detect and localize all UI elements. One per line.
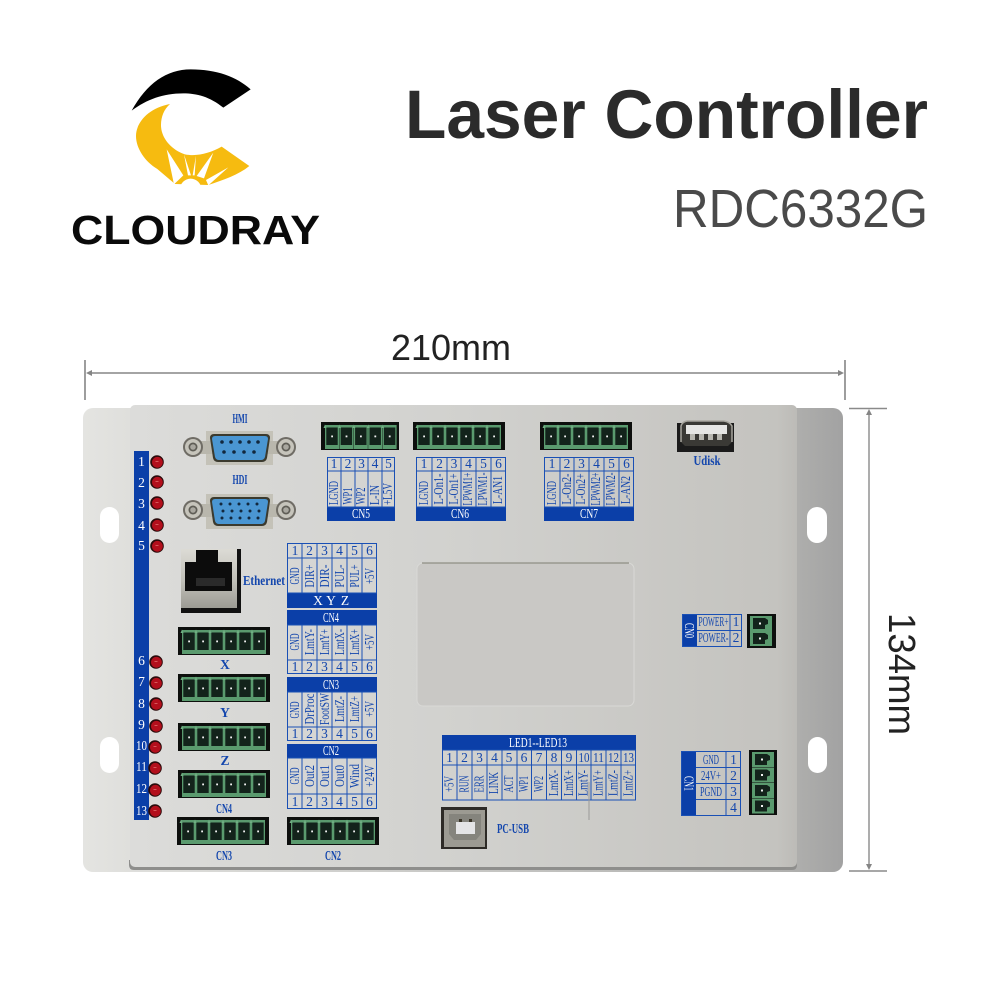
pin table CN7: 2 [564,456,570,471]
LED table [442,735,636,820]
LED strip: 8 [138,696,145,711]
CN0 terminal [747,614,776,648]
LED table: +5V [442,776,456,792]
CN1 terminal [749,750,777,815]
pin table CN3: DrProc [302,694,317,724]
mounting slots [100,507,827,773]
pin table CN4: CN4 [323,610,339,625]
CN1 power table: 3 [730,784,737,799]
LED table: RUN [456,775,472,792]
mounting flange [83,408,843,872]
terminal CN2: CN2 [325,848,341,863]
pin table CN4: LmtY- [302,629,317,655]
LED table: 8 [551,750,558,765]
pin table CN3: CN3 [323,677,339,692]
LED strip: 12 [136,781,147,796]
LED strip: 9 [138,717,145,732]
LED strip: 7 [138,674,145,689]
pin table CN2: Out1 [317,765,332,787]
pin table CN4: LmtX- [332,629,347,655]
pin table CN6: L-AN1 [490,476,505,504]
pin table CN6: 2 [436,456,443,471]
pin table CN3: +5V [362,701,377,717]
pin table CN5: WP1 [340,488,355,504]
terminal CN4: CN4 [216,801,232,816]
LED strip: 13 [136,803,147,818]
pin table CN7: L-On2+ [573,474,588,504]
terminal Z: Z [220,753,230,768]
pin table X Y Z [287,543,377,608]
pin table CN5 [326,456,395,521]
PC-USB port [441,807,529,849]
logo wordmark: CLOUDRAY [71,207,320,253]
pin table CN4: 6 [366,659,373,674]
pin table CN5: WP2 [353,488,368,504]
pin table CN7: CN7 [580,506,598,521]
LED strip: 4 [138,518,145,533]
HDI connector [183,472,296,529]
pin table CN7: LGND [544,481,559,505]
pin table CN2: 6 [366,794,373,809]
pin table X Y Z: X [313,593,323,608]
pin table CN2: 2 [306,794,313,809]
LED table: 12 [608,750,619,765]
pin table CN6: 3 [451,456,458,471]
pin table X Y Z: DIR+ [302,564,317,588]
terminal Y: Y [220,705,230,720]
pin table CN4: +5V [362,634,377,650]
CN0 power table: 1 [733,614,739,629]
LED strip: 1 [138,454,145,469]
LED table: LmtX- [546,770,561,796]
terminal CN2 [287,817,379,863]
LED strip: 5 [138,538,145,553]
LED table: ACT [501,775,516,792]
LED table: ERR [472,776,486,792]
pin table CN7: LPWM2+ [588,472,603,506]
pin table CN3: 3 [321,726,328,741]
pin table CN3: GND [287,701,302,718]
width dimension [85,327,845,400]
pin table X Y Z: PUL+ [347,564,362,588]
terminal CN3: CN3 [216,848,232,863]
LED table: LmtX+ [561,770,576,796]
pin table CN4: LmtY+ [317,629,332,655]
terminal X: X [220,657,230,672]
LED table: LmtZ- [606,770,620,796]
LED table: 10 [578,750,590,765]
pin table CN4: 3 [321,659,328,674]
pin table CN3: 2 [306,726,313,741]
pin table CN6 [416,456,506,521]
LED table: LmtY+ [590,770,606,796]
LED table: 6 [521,750,528,765]
pin table CN4: LmtX+ [347,629,362,655]
pin table CN7 [544,456,634,521]
pin table CN5: L-IN [367,485,382,505]
LED table: 5 [506,750,513,765]
terminal CN7 [540,422,632,450]
Ethernet port: Ethernet [243,573,285,588]
pin table CN2: Wind [347,764,362,788]
CN1 power table: 24V+ [701,768,721,783]
pin table CN5: 5 [385,456,392,471]
pin table CN4: 2 [306,659,313,674]
CN0 power table: CN0 [682,623,697,638]
terminal CN6 [413,422,505,450]
LED strip [134,451,149,820]
pin table CN5: LGND [326,481,341,505]
pin table CN5: 3 [358,456,365,471]
pin table CN3: 6 [366,726,373,741]
CN0 power table [682,614,742,647]
pin table CN2: Out0 [332,765,347,787]
LED table: LED1--LED13 [509,735,567,750]
LED table: 4 [491,750,498,765]
pin table CN7: 3 [578,456,585,471]
pin table X Y Z: Y [326,593,336,608]
LED table: WP2 [531,776,546,792]
pin table CN7: LPWM2- [603,472,618,506]
width dimension: 210mm [391,327,511,368]
pin table X Y Z: GND [287,567,302,584]
terminal CN4 [178,770,270,816]
LED table: 3 [476,750,483,765]
HMI connector: HMI [232,411,248,426]
display window [417,563,634,706]
LED table: 7 [536,750,543,765]
pin table CN2: CN2 [323,743,339,758]
pin table CN6: L-On1+ [446,474,461,504]
terminal X [178,627,270,672]
pin table CN2: GND [287,767,302,784]
pin table CN2: +24V [362,765,377,787]
pin table CN6: LGND [416,481,431,505]
CN0 power table: POWER- [698,630,729,645]
pin table CN7: 5 [608,456,615,471]
height dimension: 134mm [880,613,922,735]
LED strip: 11 [136,759,147,774]
pin table CN6: LPWM1+ [460,472,475,506]
pin table CN3: LmtZ- [332,696,347,722]
pin table CN6: CN6 [451,506,469,521]
pin table CN6: 4 [465,456,472,471]
pin table CN5: 1 [331,456,337,471]
pin table X Y Z: 2 [306,543,313,558]
pin table CN3 [287,677,377,741]
pin table X Y Z: 4 [336,543,343,558]
pin table CN6: L-On1- [431,473,446,504]
LED table: LmtZ+ [620,770,636,796]
red LEDs [148,455,164,818]
pin table CN5: 2 [345,456,351,471]
pin table CN3: 1 [292,726,298,741]
LED table: WP1 [516,776,531,792]
pin table CN3: 5 [351,726,358,741]
HMI connector [183,411,296,465]
pin table CN3: FootSW [317,693,332,725]
CN1 power table: 1 [730,752,737,767]
LED strip: 6 [138,653,145,668]
pin table CN2: 4 [336,794,343,809]
CN1 power table: GND [703,752,719,767]
terminal CN5 [321,422,399,450]
pin table CN4 [287,610,377,674]
pin table CN2: Out2 [302,765,317,787]
CN1 power table: CN1 [682,776,696,791]
pin table CN5: CN5 [352,506,370,521]
LED table: 2 [461,750,468,765]
terminal Y [178,674,270,720]
pin table CN7: L-AN2 [618,476,633,504]
pin table CN4: GND [287,633,302,650]
Ethernet port [181,549,285,613]
pin table CN6: 5 [480,456,487,471]
pin table CN5: +L5V [380,483,395,505]
pin table X Y Z: 1 [292,543,298,558]
pin table CN7: L-On2- [559,473,574,504]
pin table CN2: 5 [351,794,358,809]
pin table CN7: 1 [549,456,555,471]
CN1 power table: 4 [730,800,737,815]
LED table: LmtY- [576,770,590,796]
terminal CN3 [177,817,269,863]
LED table: 9 [566,750,573,765]
pin table X Y Z: Z [341,593,349,608]
LED strip: 2 [138,475,145,490]
LED table: 11 [593,750,604,765]
LED table: 1 [446,750,453,765]
logo: Cloudray [71,69,320,253]
pin table X Y Z: PUL- [332,564,347,588]
pin table X Y Z: 5 [351,543,358,558]
main body [129,860,797,870]
LED strip: 3 [138,496,145,511]
LED table: LINK [486,772,501,794]
LED strip: 10 [136,738,147,753]
pin table CN2 [287,743,377,809]
title: Laser Controller [405,76,928,153]
CN1 power table [681,751,740,816]
pin table X Y Z: DIR- [317,564,332,588]
Udisk USB port [677,421,734,468]
pin table CN7: 6 [623,456,630,471]
pin table CN6: 6 [495,456,502,471]
pin table CN5: 4 [372,456,379,471]
Udisk USB port: Udisk [694,453,721,468]
CN0 power table: POWER+ [698,614,728,629]
terminal Z [178,723,270,768]
pin table CN2: 3 [321,794,328,809]
pin table CN2: 1 [292,794,298,809]
controller enclosure [83,405,843,872]
model subtitle: RDC6332G [673,179,928,239]
pin table CN6: 1 [421,456,427,471]
pin table X Y Z: 6 [366,543,373,558]
pin table X Y Z: +5V [362,568,377,584]
pin table CN6: LPWM1- [475,472,490,506]
pin table CN4: 4 [336,659,343,674]
icon: Cloudray crescent mark [132,69,251,200]
LED table: 13 [623,750,634,765]
pin table CN3: 4 [336,726,343,741]
pin table CN3: LmtZ+ [347,696,362,722]
pin table CN7: 4 [593,456,600,471]
PC-USB port: PC-USB [497,821,529,836]
pin table X Y Z: 3 [321,543,328,558]
pin table CN4: 5 [351,659,358,674]
pin table CN4: 1 [292,659,298,674]
height dimension [849,408,922,871]
CN1 power table: PGND [700,784,722,799]
HDI connector: HDI [232,472,248,487]
CN0 power table: 2 [733,630,739,645]
CN1 power table: 2 [730,768,737,783]
